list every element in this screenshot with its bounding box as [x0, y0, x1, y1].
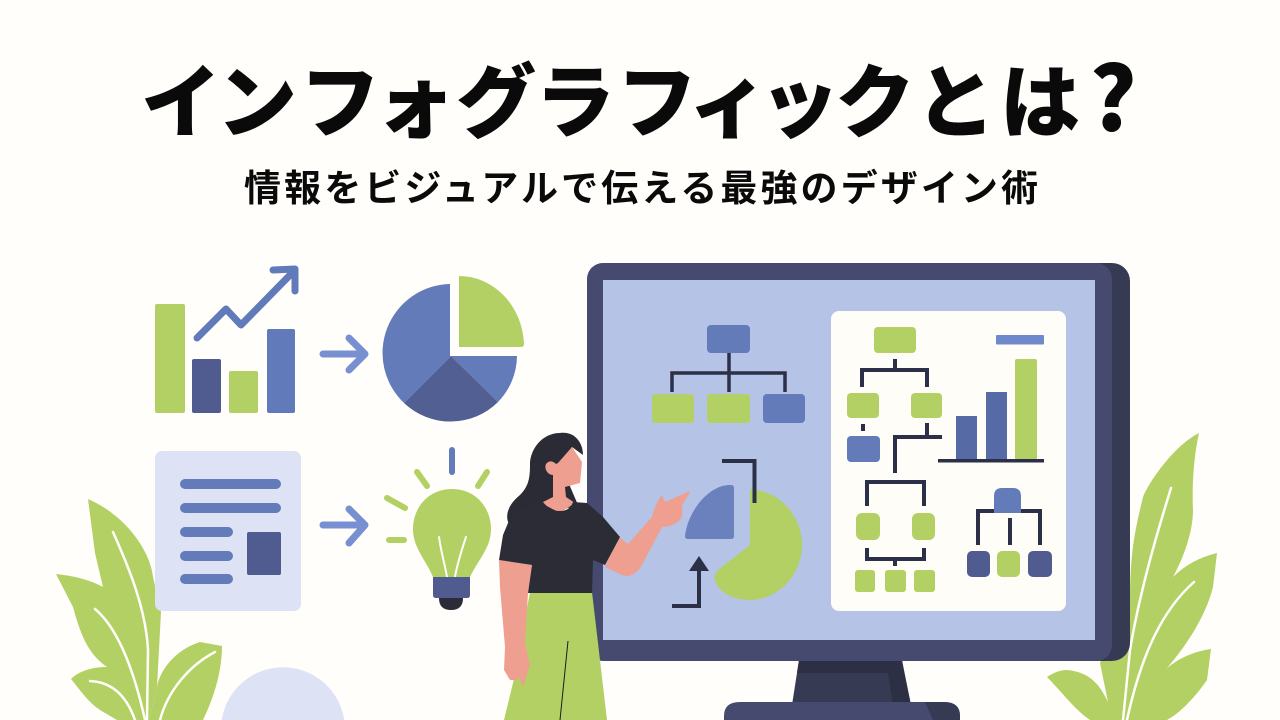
icon: pie chart — [383, 276, 524, 422]
mini bar chart — [938, 335, 1044, 462]
screen: org chart left — [652, 325, 805, 423]
left arm — [499, 560, 532, 687]
icon: document panel — [155, 451, 301, 611]
pants seam — [560, 641, 568, 720]
presenter figure — [499, 433, 690, 720]
pants — [504, 592, 607, 720]
face and neck — [541, 447, 582, 513]
icon: bar chart with rising trend line — [155, 269, 295, 413]
monitor frame — [587, 263, 1130, 661]
decoration: right plant — [1047, 433, 1217, 720]
screen: white diagram panel — [831, 311, 1066, 611]
hair — [507, 433, 583, 526]
right arm — [605, 491, 690, 576]
subtitle: 情報をビジュアルで伝える最強のデザイン術 — [244, 158, 1038, 212]
arrow: document to bulb — [323, 509, 365, 543]
screen: pie chart with arrows — [672, 461, 802, 606]
org chart top — [847, 327, 942, 473]
decoration: left plant — [56, 499, 222, 720]
title: ? — [1090, 30, 1137, 157]
org chart bottom — [855, 482, 935, 592]
mini hierarchy — [967, 488, 1052, 577]
arrow: chart to pie — [323, 338, 365, 370]
icon: light bulb — [387, 450, 491, 610]
shirt — [499, 502, 620, 593]
title: インフォグラフィックとは — [141, 39, 1080, 155]
monitor stand — [724, 660, 960, 720]
decoration: lavender semicircle — [222, 667, 344, 720]
